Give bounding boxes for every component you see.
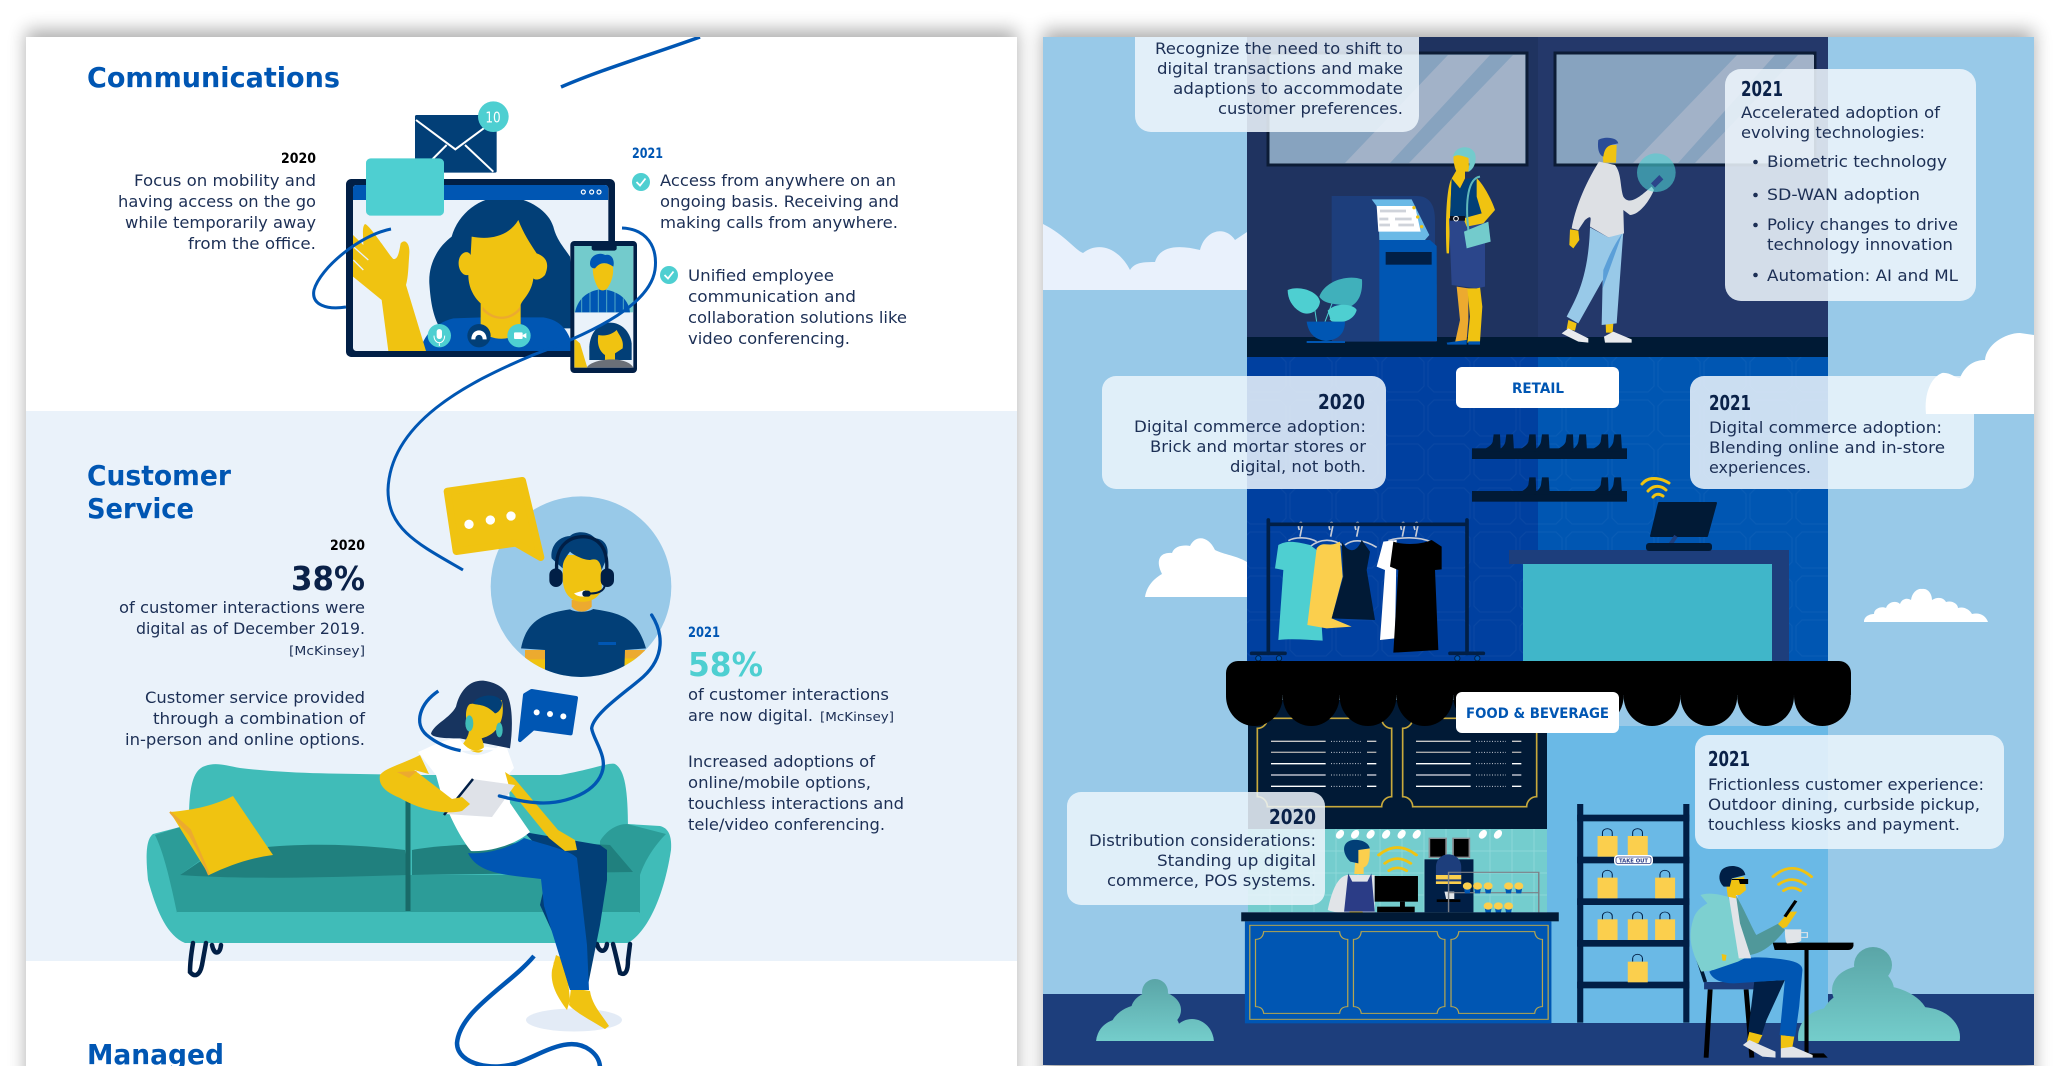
callout: 2021 frictionless: touchless kiosks and payment. xyxy=(1708,815,1960,834)
retail floor wall xyxy=(1247,357,1828,661)
callout: recognize the need: digital transactions and make xyxy=(1157,59,1403,78)
cafe table xyxy=(1773,929,1853,1058)
tablet device xyxy=(444,779,515,817)
callout: 2020 digital commerce xyxy=(1102,376,1386,489)
illustration: video call xyxy=(346,101,637,373)
shirt xyxy=(418,739,530,851)
text block: customer service 2020: Customer service provided xyxy=(145,688,365,707)
text block: customer service 2021: are now digital. xyxy=(688,706,813,725)
text block: communications 2021: collaboration solutions like xyxy=(688,308,907,327)
text block: communications 2021: Access from anywhere on an xyxy=(660,171,896,190)
text block: communications 2020: 2020 xyxy=(281,151,316,167)
callout: 2021 frictionless xyxy=(1695,735,2004,849)
text block: customer service 2020: 2020 xyxy=(330,538,365,554)
callout: 2021 technologies xyxy=(1725,69,1976,301)
text block: communications 2021: 2021 xyxy=(632,146,663,162)
callout: 2020 digital commerce: Brick and mortar stores or xyxy=(1150,437,1366,456)
callout: 2021 technologies: technology innovation xyxy=(1767,235,1953,254)
callout: 2021 technologies: 2021 xyxy=(1741,77,1783,101)
panel: communications and customer service xyxy=(26,37,1017,1066)
callout: 2021 technologies: Accelerated adoption of xyxy=(1741,103,1940,122)
curve: around woman head xyxy=(420,691,461,751)
icon: point of sale screen xyxy=(1646,503,1716,551)
interior: food area wall xyxy=(1248,700,1547,912)
text block: customer service 2021: online/mobile options, xyxy=(688,773,871,792)
icon: wifi cafe xyxy=(1379,847,1416,871)
panel: retail and food building xyxy=(1043,37,2034,1066)
figure: woman with bag xyxy=(1446,147,1495,345)
callout: 2021 technologies: Automation: AI and ML xyxy=(1767,266,1958,285)
callout: 2020 digital commerce: Digital commerce adoption: xyxy=(1134,417,1366,436)
shelf unit xyxy=(1577,804,1689,1023)
label: food and beverage xyxy=(1456,692,1619,733)
icon: wifi retail xyxy=(1642,478,1669,497)
callout: 2021 digital commerce: Digital commerce adoption: xyxy=(1709,418,1942,437)
icon: wifi customer xyxy=(1773,868,1811,891)
figure: man with phone xyxy=(1562,138,1676,343)
icon: coffee machine xyxy=(1424,838,1473,912)
garment: teal dress xyxy=(1275,542,1323,641)
callout: 2020 distribution: Distribution considerations: xyxy=(1089,831,1316,850)
legs xyxy=(468,832,609,1029)
window left xyxy=(1268,53,1527,165)
callout: 2021 frictionless: 2021 xyxy=(1708,747,1750,771)
head xyxy=(419,681,512,753)
garment: navy dress xyxy=(1332,540,1375,620)
callout: 2020 digital commerce: digital, not both. xyxy=(1230,457,1366,476)
tablet xyxy=(346,158,615,357)
text block: communications 2021: video conferencing. xyxy=(688,329,850,348)
text block: communications 2021: ongoing basis. Receiving and xyxy=(660,192,899,211)
bush right xyxy=(1798,947,1960,1066)
icon: check xyxy=(660,266,678,284)
callout: 2020 digital commerce: 2020 xyxy=(1318,390,1365,414)
garment: yellow dress xyxy=(1307,542,1352,628)
sofa legs xyxy=(190,943,630,975)
callout: 2021 digital commerce xyxy=(1690,376,1974,489)
text block: communications 2021: Unified employee xyxy=(688,266,834,285)
pastry case xyxy=(1449,872,1539,913)
cafe counter xyxy=(1241,912,1559,1023)
text block: customer service 2020: in-person and online options. xyxy=(125,730,365,749)
illustration: seated woman with tablet xyxy=(380,681,609,1029)
text block: communications 2020: from the office. xyxy=(188,234,316,253)
callout: 2021 technologies: SD-WAN adoption xyxy=(1767,185,1920,204)
icon: agent in circle xyxy=(491,496,671,680)
callout: 2021 technologies: evolving technologies: xyxy=(1741,123,1925,142)
cloud right small xyxy=(1864,589,1988,622)
shoe shelves xyxy=(1472,434,1627,502)
callout: 2021 technologies: Biometric technology xyxy=(1767,152,1947,171)
pillow xyxy=(170,796,273,875)
stool xyxy=(1694,947,1755,1058)
call controls xyxy=(428,324,531,347)
text block: customer service 2021: touchless interactions and xyxy=(688,794,904,813)
text block: customer service 2021: 2021 xyxy=(688,625,720,641)
heading: Customer Service xyxy=(88,464,231,519)
callout: 2021 digital commerce: experiences. xyxy=(1709,458,1811,477)
text block: communications 2021: communication and xyxy=(688,287,856,306)
callout: 2020 distribution: Standing up digital xyxy=(1157,851,1316,870)
curve: agent to tablet xyxy=(499,615,660,803)
curve: from call to customer service xyxy=(388,228,655,570)
cloud right top xyxy=(1926,333,2034,414)
heading: Customer Service: Customer xyxy=(87,459,231,492)
callout: recognize the need: customer preferences. xyxy=(1218,99,1403,118)
window right xyxy=(1555,53,1815,165)
awning xyxy=(1226,661,1851,726)
icon: plant xyxy=(1288,278,1362,343)
heading: Customer Service: Service xyxy=(87,492,194,525)
curve: top stroke xyxy=(561,37,700,87)
sign: take out xyxy=(1614,855,1653,866)
curve: bottom flourish xyxy=(457,956,600,1066)
upper floor walls xyxy=(1247,37,1538,337)
text block: customer service 2020 xyxy=(119,538,365,749)
figure: customer xyxy=(1691,866,1813,1058)
callout: 2020 distribution: commerce, POS systems. xyxy=(1107,871,1316,890)
icon: envelope: 10 xyxy=(485,109,501,127)
icon: monitor xyxy=(1375,876,1418,912)
callout: 2021 digital commerce: 2021 xyxy=(1709,391,1751,415)
figure: barista xyxy=(1328,840,1375,917)
text block: customer service 2020: [McKinsey] xyxy=(289,643,365,658)
bush left xyxy=(1096,979,1214,1066)
scene: cafe customer xyxy=(1691,866,1853,1058)
callout: recognize the need xyxy=(1135,37,1419,132)
heading: Communications: Communications xyxy=(87,61,340,94)
text block: customer service 2020: through a combination of xyxy=(153,709,365,728)
callout: 2021 technologies: Policy changes to drive xyxy=(1767,215,1958,234)
callout: recognize the need: Recognize the need to shift to xyxy=(1155,39,1403,58)
retail counter xyxy=(1509,550,1789,661)
phone xyxy=(570,241,637,373)
text block: communications 2020: having access on the go xyxy=(118,192,316,211)
illustration: sofa xyxy=(147,764,671,975)
text block: customer service 2021: 58% xyxy=(688,645,763,684)
text block: customer service 2021: tele/video conferencing. xyxy=(688,815,885,834)
cloud left xyxy=(1043,224,1247,290)
curve: tablet left loop xyxy=(314,229,391,308)
clothing rack xyxy=(1252,520,1483,661)
callout: 2020 distribution: 2020 xyxy=(1269,805,1316,829)
text block: customer service 2021 xyxy=(688,625,904,834)
text block: communications 2020 xyxy=(118,151,316,253)
label: retail: RETAIL xyxy=(1512,381,1564,397)
icon: ATM xyxy=(1332,196,1437,342)
text block: customer service 2021: Increased adoptions of xyxy=(688,752,875,771)
ground xyxy=(1043,994,2034,1065)
text block: customer service 2021: [McKinsey] xyxy=(820,709,894,724)
text block: communications 2021 xyxy=(632,146,907,348)
scene: ATM customers xyxy=(1288,138,1676,345)
icon: yellow speech bubble xyxy=(447,481,541,557)
callout: 2020 distribution xyxy=(1067,792,1325,905)
arm shadow xyxy=(397,771,417,778)
hanging mugs xyxy=(1334,829,1504,840)
callout: 2021 frictionless: Outdoor dining, curbside pickup, xyxy=(1708,795,1980,814)
customer service background band xyxy=(26,411,1017,961)
icon: blue speech bubble xyxy=(520,691,576,740)
text block: customer service 2020: digital as of December 2019. xyxy=(136,619,365,638)
text block: customer service 2020: 38% xyxy=(291,559,365,598)
label: retail xyxy=(1456,367,1619,408)
menu boards xyxy=(1257,718,1537,807)
icon: check xyxy=(632,173,650,191)
icon: envelope xyxy=(415,101,509,173)
scene: cafe counter and shelves xyxy=(1241,804,1689,1023)
text block: communications 2020: Focus on mobility and xyxy=(134,171,316,190)
upper floor slab xyxy=(1247,337,1828,357)
sign: take out: TAKE OUT xyxy=(1619,858,1648,864)
illustration: floor shadow xyxy=(526,1008,622,1032)
callout: 2021 digital commerce: Blending online and in-store xyxy=(1709,438,1945,457)
callout: 2021 frictionless: Frictionless customer experience: xyxy=(1708,775,1984,794)
sky xyxy=(1043,37,2034,1065)
garment: black dress xyxy=(1390,540,1442,653)
text block: customer service 2020: of customer interactions were xyxy=(119,598,365,617)
text block: communications 2021: making calls from anywhere. xyxy=(660,213,898,232)
interior: food area right xyxy=(1547,726,1828,1023)
text block: communications 2020: while temporarily away xyxy=(125,213,316,232)
text block: customer service 2021: of customer interactions xyxy=(688,685,889,704)
right arm xyxy=(505,772,577,851)
callout: recognize the need: adaptions to accommodate xyxy=(1173,79,1403,98)
garment: white dress xyxy=(1377,540,1397,640)
label: food and beverage: FOOD & BEVERAGE xyxy=(1466,706,1609,722)
cloud middle xyxy=(1145,538,1247,597)
left arm xyxy=(380,755,470,812)
